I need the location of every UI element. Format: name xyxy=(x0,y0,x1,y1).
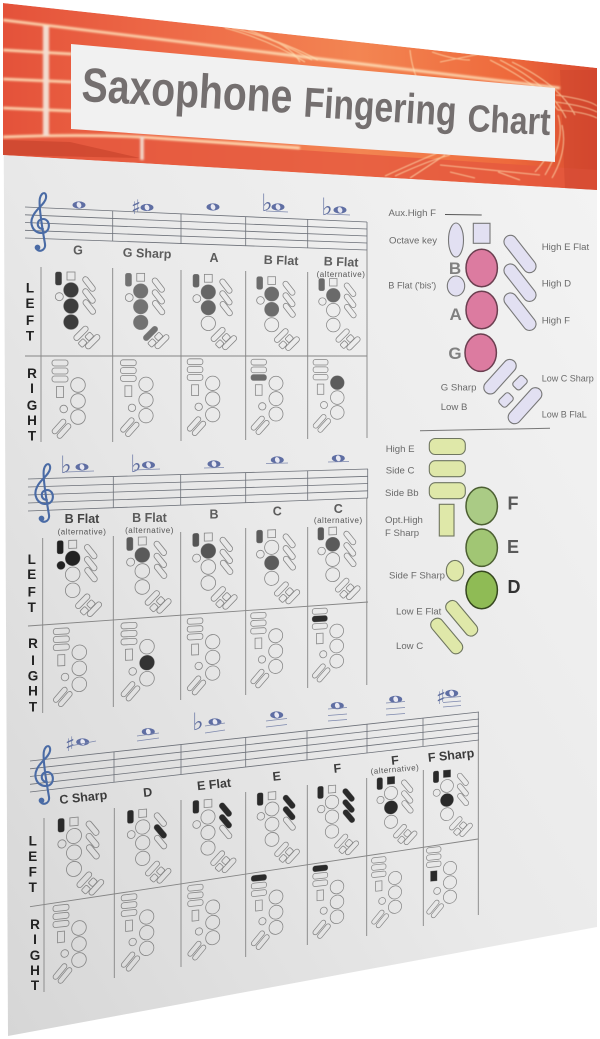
LEFT RIGHT labels row 3: F xyxy=(29,864,37,880)
B A G letters: A xyxy=(450,305,462,324)
LEFT RIGHT labels row 3: E xyxy=(28,849,37,864)
separator line xyxy=(420,428,550,431)
B A G letters: G xyxy=(448,344,462,363)
note labels row 3: E xyxy=(272,769,282,784)
LEFT RIGHT labels row 3: H xyxy=(30,963,40,978)
grid row 1 xyxy=(25,250,367,442)
F E D letters xyxy=(507,494,520,597)
icon: treble clef xyxy=(35,464,53,522)
key labels left hand: Low B xyxy=(441,402,467,413)
key labels right hand: Low E Flat xyxy=(396,606,442,618)
fingering: G Sharp right xyxy=(120,360,153,438)
lilac keys xyxy=(447,223,545,426)
note labels row 2: B xyxy=(209,508,219,522)
fingering: B Flat alternative 2 left xyxy=(127,536,172,616)
fingering: D right xyxy=(120,892,154,973)
key labels right hand: Side Bb xyxy=(385,488,419,499)
note labels row 2: (alternative) xyxy=(125,526,174,535)
fingering: E Flat right xyxy=(187,882,220,962)
LEFT RIGHT labels row 2: T xyxy=(29,700,38,714)
fingering: C right xyxy=(250,611,283,689)
notes row 2: ♭ xyxy=(130,450,142,478)
title xyxy=(80,59,552,144)
B A G letters xyxy=(448,259,462,363)
LEFT RIGHT labels row 3: T xyxy=(31,978,40,993)
fingering: F right xyxy=(312,863,344,940)
fingering: G Sharp left xyxy=(125,273,170,350)
LEFT RIGHT labels row 1: F xyxy=(26,313,34,328)
key labels left hand: Low B FlaL xyxy=(542,410,587,420)
LEFT RIGHT labels row 3: I xyxy=(33,932,37,947)
aux high F line xyxy=(445,214,482,216)
staff row 2 xyxy=(28,450,368,522)
fingering: C Sharp right xyxy=(52,902,86,985)
note labels row 2: C xyxy=(273,504,282,518)
key labels right hand: Side C xyxy=(386,466,415,476)
note labels row 1: B Flat xyxy=(264,253,300,268)
fingering: F Sharp left xyxy=(433,768,473,840)
key guide: left hand, pink and lilac xyxy=(388,208,594,426)
LEFT RIGHT labels row 1: T xyxy=(26,328,35,344)
note labels row 1 xyxy=(73,244,365,279)
key labels left hand: Octave key xyxy=(389,236,437,246)
key labels left hand: High E Flat xyxy=(542,242,589,253)
grid row 2 xyxy=(28,498,368,713)
LEFT RIGHT labels row 3: G xyxy=(30,948,40,963)
fingering: C alternative right xyxy=(311,607,344,683)
title panel xyxy=(71,44,555,162)
LEFT RIGHT labels row 1: L xyxy=(26,280,34,296)
key labels right hand: Side F Sharp xyxy=(389,570,445,582)
fingering: E left xyxy=(257,789,301,867)
key labels right hand: High E xyxy=(386,444,414,455)
key labels left hand: Low C Sharp xyxy=(542,374,594,384)
note labels row 1: A xyxy=(209,251,219,265)
icon: treble clef xyxy=(31,193,49,251)
LEFT RIGHT labels row 1 xyxy=(25,280,37,444)
key guide: right hand, green xyxy=(385,438,520,656)
LEFT RIGHT labels row 3 xyxy=(28,834,40,993)
notes row 3: ♭ xyxy=(192,708,204,736)
key labels left hand: B Flat ('bis') xyxy=(388,280,436,290)
note labels row 2 xyxy=(58,502,363,536)
key labels right hand: Low C xyxy=(396,641,423,652)
notes row 2 xyxy=(60,450,349,479)
note labels row 2: (alternative) xyxy=(58,528,106,536)
F E D letters: D xyxy=(508,577,520,597)
notes row 3: ♯ xyxy=(436,685,446,709)
notes row 3 xyxy=(65,685,461,756)
note labels row 2: C xyxy=(334,502,343,516)
icon: treble clef xyxy=(35,746,53,804)
note labels row 3: (alternative) xyxy=(370,763,420,776)
fingering: F left xyxy=(318,783,360,859)
LEFT RIGHT labels row 2: I xyxy=(31,653,35,668)
grid row 3 xyxy=(30,740,478,992)
LEFT RIGHT labels row 2: E xyxy=(27,567,36,582)
key labels left hand xyxy=(388,208,594,420)
fingering: G left xyxy=(55,272,101,350)
fingering: B Flat alternative left xyxy=(319,279,361,351)
title: Saxophone xyxy=(80,59,294,124)
fingering: F alternative right xyxy=(371,855,402,930)
key labels right hand: Opt.High xyxy=(385,515,423,526)
fingering: A right xyxy=(186,359,220,437)
LEFT RIGHT labels row 3: T xyxy=(29,880,38,895)
fingering: E Flat left xyxy=(193,797,237,877)
LEFT RIGHT labels row 2: R xyxy=(28,636,38,651)
fingering: B Flat alternative 2 right xyxy=(120,621,154,703)
fingering: B Flat alternative 1 left xyxy=(57,539,103,619)
fingering: B left xyxy=(193,532,238,612)
fingering: C Sharp left xyxy=(58,815,105,899)
key labels right hand xyxy=(385,444,445,652)
LEFT RIGHT labels row 2: F xyxy=(28,584,36,600)
green finger holes xyxy=(466,487,497,609)
fingering: A left xyxy=(193,274,238,351)
key labels left hand: G Sharp xyxy=(441,382,476,394)
note labels row 3: C Sharp xyxy=(59,788,108,807)
LEFT RIGHT labels row 3: L xyxy=(29,834,37,848)
fingering: B Flat alternative 1 right xyxy=(52,627,87,708)
LEFT RIGHT labels row 2: T xyxy=(28,600,37,615)
fingering: C left xyxy=(256,529,301,606)
notes row 1 xyxy=(72,189,350,221)
fingering: D left xyxy=(127,807,172,887)
notes row 1: ♯ xyxy=(131,195,141,219)
key labels right hand: F Sharp xyxy=(385,528,419,539)
fingering: E right xyxy=(250,873,283,951)
LEFT RIGHT labels row 2: H xyxy=(28,684,38,698)
notes row 1: ♭ xyxy=(261,189,273,217)
F E D letters: E xyxy=(507,537,519,557)
fingering: G right xyxy=(51,360,85,439)
title: Chart xyxy=(467,98,552,144)
key labels left hand: High F xyxy=(542,316,570,326)
note labels row 3: E Flat xyxy=(196,776,233,793)
LEFT RIGHT labels row 1: E xyxy=(25,296,35,311)
note labels row 3: D xyxy=(143,785,153,800)
note labels row 3 xyxy=(59,746,475,807)
B A G letters: B xyxy=(449,259,461,278)
F E D letters: F xyxy=(508,494,518,514)
LEFT RIGHT labels row 1: H xyxy=(27,413,37,428)
note labels row 2: B Flat xyxy=(65,512,100,526)
LEFT RIGHT labels row 1: R xyxy=(27,366,37,381)
note labels row 1: B Flat xyxy=(324,254,360,270)
LEFT RIGHT labels row 2: L xyxy=(28,552,36,567)
fingering: F alternative left xyxy=(377,774,418,848)
LEFT RIGHT labels row 1: T xyxy=(28,428,37,444)
title: Fingering xyxy=(302,79,458,135)
key labels left hand: High D xyxy=(542,278,571,290)
note labels row 1: (alternative) xyxy=(317,270,365,279)
note labels row 1: G Sharp xyxy=(123,246,172,261)
notes row 2: ♭ xyxy=(60,451,72,479)
pink finger holes xyxy=(465,249,497,371)
LEFT RIGHT labels row 1: I xyxy=(30,381,34,396)
staff row 3 xyxy=(30,685,479,804)
note labels row 3: F xyxy=(391,753,400,768)
pale green keys xyxy=(428,438,480,656)
note labels row 3: F xyxy=(333,761,342,776)
note labels row 2: (alternative) xyxy=(314,516,363,525)
fingering: B Flat right xyxy=(250,359,283,436)
fingering: B right xyxy=(186,617,220,696)
fingering: B Flat left xyxy=(257,277,301,352)
LEFT RIGHT labels row 2 xyxy=(27,552,38,714)
LEFT RIGHT labels row 2: G xyxy=(28,668,38,684)
banner: red and orange music background xyxy=(3,3,597,190)
key labels left hand: Aux.High F xyxy=(388,208,436,219)
fingering: F Sharp right xyxy=(426,845,457,920)
fingering: B Flat alternative right xyxy=(312,359,344,433)
note labels row 1: G xyxy=(73,244,83,258)
LEFT RIGHT labels row 1: G xyxy=(27,398,37,413)
staff row 1 xyxy=(25,189,367,251)
note labels row 2: B Flat xyxy=(132,511,168,525)
fingering: C alternative left xyxy=(318,526,361,602)
notes row 3: ♯ xyxy=(65,732,75,756)
notes row 1: ♭ xyxy=(321,193,333,221)
note labels row 3: F Sharp xyxy=(427,746,475,765)
LEFT RIGHT labels row 3: R xyxy=(30,917,40,932)
